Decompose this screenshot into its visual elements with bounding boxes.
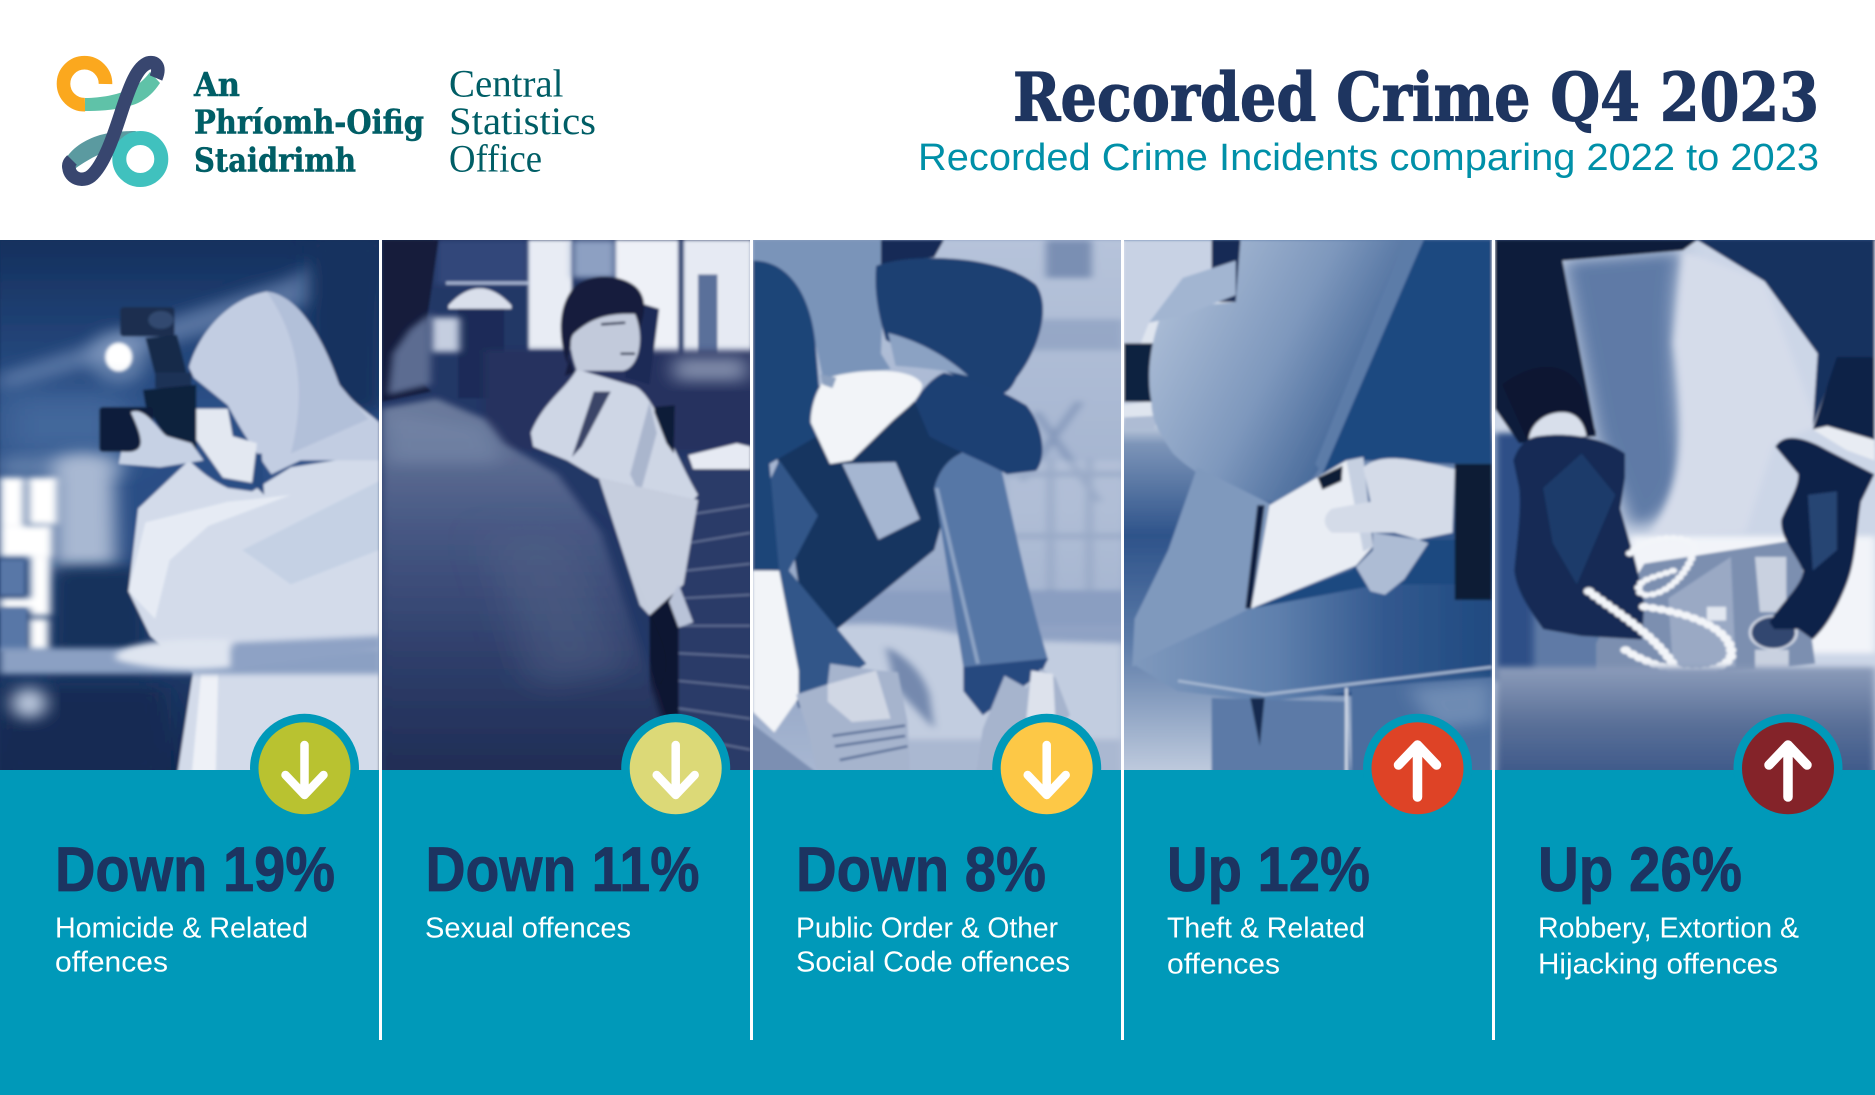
stat heading: Up 26%: [1538, 835, 1742, 905]
label text: [55, 912, 308, 979]
logo text: English name: [449, 63, 596, 181]
subtitle: Recorded Crime Incidents comparing 2022 to 2023: [918, 137, 1819, 179]
label text: Homicide & Related: [55, 912, 308, 944]
panel: homicide: [55, 714, 359, 979]
logo text: English name: Statistics: [449, 100, 596, 143]
panel: theft: [1167, 714, 1472, 980]
logo text: Irish name: Phríomh-Oifig: [194, 102, 424, 142]
stat heading: Down 8%: [796, 835, 1046, 905]
label text: Theft & Related: [1167, 912, 1365, 944]
column dividers: [379, 240, 1495, 1040]
label text: offences: [55, 947, 168, 979]
photo: pickpocket: [1120, 240, 1496, 777]
teal lower band: [0, 770, 1875, 1095]
icon: up arrow badge dark red: [1734, 714, 1842, 823]
icon: down arrow badge olive: [250, 714, 359, 823]
icon: CSO knot symbol: [64, 63, 161, 180]
icon: down arrow badge yellow: [992, 714, 1101, 823]
label text: Social Code offences: [796, 947, 1070, 979]
logo text: English name: Office: [449, 138, 542, 181]
label text: Sexual offences: [425, 912, 631, 944]
photo: hooded youth with bottle: [750, 240, 1128, 781]
icon: down arrow badge pale yellow: [621, 714, 730, 823]
logo text: Irish name: [193, 65, 424, 180]
logo text: Irish name: An: [193, 65, 240, 104]
label text: Robbery, Extortion &: [1538, 912, 1799, 944]
photo: gloved hands stealing jewellery: [1490, 240, 1875, 781]
label text: [796, 912, 1070, 979]
logo text: Irish name: Staidrimh: [194, 141, 356, 180]
label text: [1538, 912, 1799, 980]
label text: Public Order & Other: [796, 912, 1058, 944]
logo: [64, 63, 596, 181]
panel: sexual offences: [425, 714, 730, 944]
stat heading: Down 11%: [426, 835, 700, 905]
stat heading: Up 12%: [1167, 835, 1370, 905]
panel: public order: [796, 714, 1101, 979]
label text: offences: [1167, 948, 1280, 980]
photo: woman looking back: [378, 240, 761, 777]
panel: robbery: [1538, 714, 1842, 980]
icon: up arrow badge red: [1363, 714, 1472, 823]
stat heading: Down 19%: [55, 835, 335, 905]
photo: forensic photographer: [0, 240, 383, 777]
label text: Hijacking offences: [1538, 948, 1778, 980]
label text: [1167, 912, 1365, 980]
logo text: English name: Central: [449, 63, 564, 106]
